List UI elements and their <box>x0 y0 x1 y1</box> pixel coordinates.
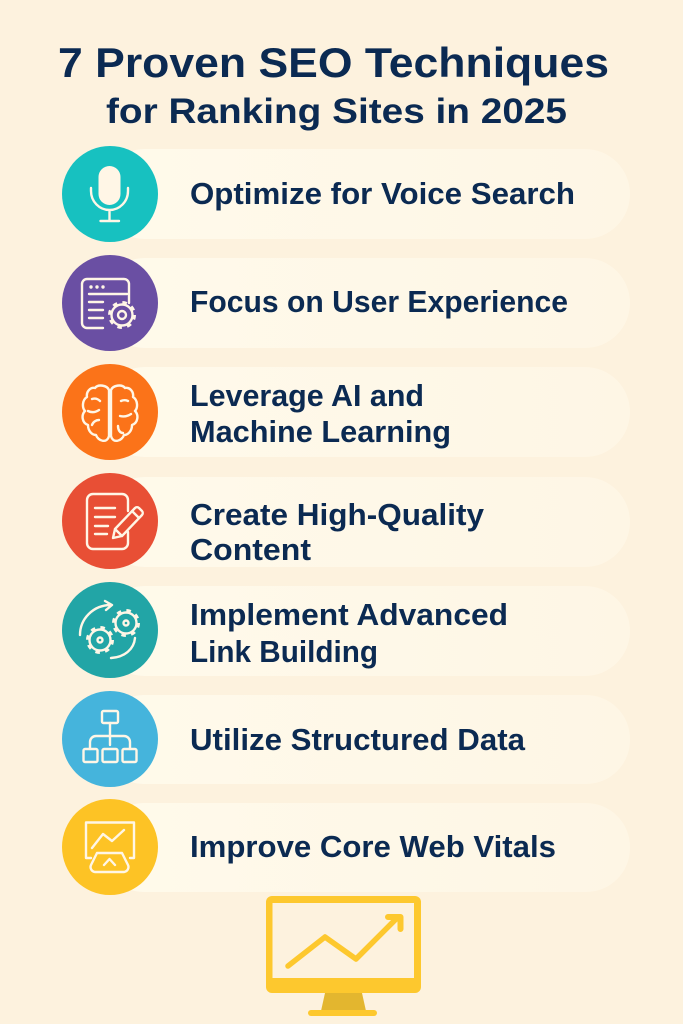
icon: gears with circular arrows <box>62 582 158 678</box>
title: 7 Proven SEO Techniques <box>58 39 609 86</box>
icon: monitor with rising chart <box>266 896 421 1016</box>
title: for Ranking Sites in 2025 <box>106 92 567 131</box>
icon: hierarchy diagram <box>62 691 158 787</box>
icon: document and pencil <box>62 473 158 569</box>
label <box>190 497 485 567</box>
panel: utilize structured data <box>62 691 630 787</box>
icon: microphone <box>62 146 158 242</box>
label: Utilize Structured Data <box>190 722 526 757</box>
label: Link Building <box>190 634 378 669</box>
panel: create high-quality content <box>62 473 630 569</box>
label: Leverage AI and <box>190 378 424 413</box>
label: Content <box>190 532 311 567</box>
label: Focus on User Experience <box>190 284 568 319</box>
panel: leverage ai and machine learning <box>62 364 630 460</box>
label: Implement Advanced <box>190 597 508 632</box>
icon: browser window with gear <box>62 255 158 351</box>
panel: improve core web vitals <box>62 799 630 895</box>
label: Machine Learning <box>190 414 451 449</box>
icon: small monitor with gauge <box>62 799 158 895</box>
panel: optimize for voice search <box>62 146 630 242</box>
label <box>190 378 451 449</box>
label: Optimize for Voice Search <box>190 176 575 211</box>
panel: focus on user experience <box>62 255 630 351</box>
title <box>58 39 609 131</box>
icon: brain <box>62 364 158 460</box>
label: Create High-Quality <box>190 497 485 532</box>
panel: implement advanced link building <box>62 582 630 678</box>
label <box>190 597 508 669</box>
label: Improve Core Web Vitals <box>190 829 556 864</box>
